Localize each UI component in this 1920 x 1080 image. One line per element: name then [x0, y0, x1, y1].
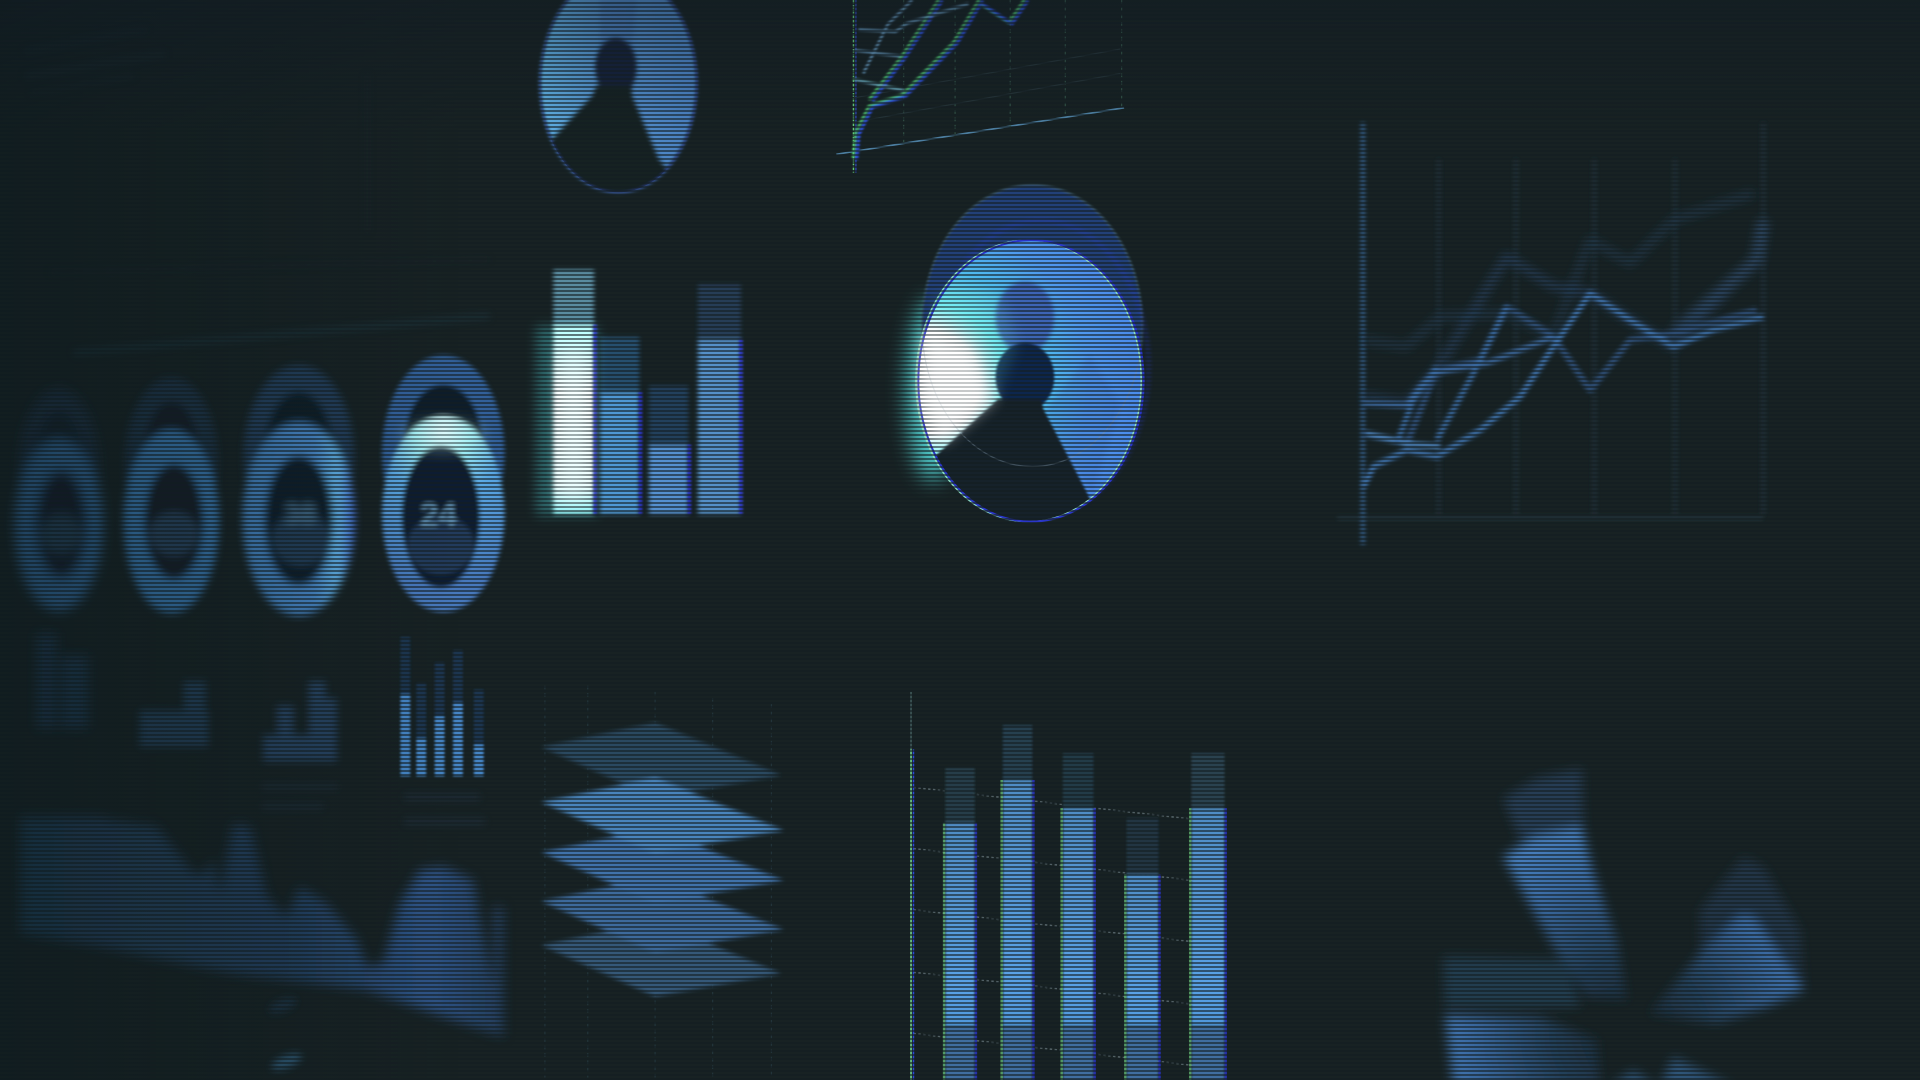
top line chart: [836, 0, 1124, 173]
right blade bright: [1650, 915, 1803, 1023]
back disc arc: [922, 344, 1140, 467]
gauge white bloom: [921, 333, 994, 443]
mini bars group 4: [400, 637, 484, 776]
top blade faded: [1503, 768, 1583, 840]
lower bar segments: [945, 1026, 1224, 1080]
dotted grid: [545, 686, 771, 1078]
data lines: [853, 0, 1028, 160]
bar glow: [536, 326, 598, 516]
chroma edges: [595, 324, 741, 514]
gauge disc: [540, 0, 697, 192]
main profile gauge: [900, 185, 1149, 539]
faded data lines: [1363, 193, 1763, 403]
mini bars group 2: [140, 681, 208, 747]
ring 2: [124, 377, 219, 613]
mini bars group 1: [37, 633, 88, 729]
ghost silhouette: [601, 2, 634, 42]
mini bars group 3: [263, 681, 337, 762]
stacked layers chart: [541, 686, 784, 1078]
gauge silhouette: [550, 36, 668, 192]
gauge rim: [540, 0, 697, 192]
faded bar tops: [553, 269, 741, 446]
axis: [911, 692, 913, 1080]
main bar chart: [536, 269, 771, 528]
bright bars: [553, 324, 741, 514]
ghost silhouette: [996, 282, 1120, 496]
baseline: [545, 527, 771, 529]
right blade faded: [1700, 857, 1803, 990]
layers: [541, 722, 784, 997]
ring 4: [382, 355, 504, 612]
front rim: [916, 240, 1144, 522]
ring gauges row: [15, 355, 504, 616]
gauge cyan bloom: [931, 288, 1016, 399]
top profile gauge: [539, 0, 698, 208]
left blade bright: [1445, 1015, 1600, 1080]
dotted gridlines: [913, 787, 1224, 1069]
axes and grid: [1337, 122, 1763, 545]
focused data lines: [1363, 293, 1763, 487]
chroma edges: [944, 780, 1226, 1080]
back disc: [922, 185, 1142, 467]
bright bars: [945, 780, 1224, 1026]
faded bar tops: [945, 725, 1224, 876]
bottom bar chart: [911, 692, 1226, 1080]
right line chart: [1337, 122, 1763, 545]
mini bar captions: [262, 784, 485, 825]
ring 3: [242, 365, 355, 616]
ring 3: 38: [284, 498, 316, 531]
silhouette: [934, 342, 1091, 521]
bar white bloom: [558, 349, 588, 502]
faint background data panel top left: [24, 29, 490, 353]
ring arc bloom: [402, 421, 485, 451]
top blade bright: [1503, 827, 1627, 1000]
bottom blades: [1610, 1057, 1733, 1080]
front disc: [917, 240, 1142, 522]
area chart: [20, 817, 503, 1037]
small highlights below area chart: [267, 994, 304, 1073]
ring 1: [15, 388, 103, 611]
mini bar charts: [37, 633, 485, 825]
radial pinwheel chart: [1443, 768, 1803, 1080]
ring 4: 24: [420, 497, 457, 535]
axes and grid: [836, 0, 1124, 173]
glow: [906, 298, 960, 481]
blue halo: [933, 220, 1149, 514]
left blade faded: [1443, 957, 1580, 1007]
